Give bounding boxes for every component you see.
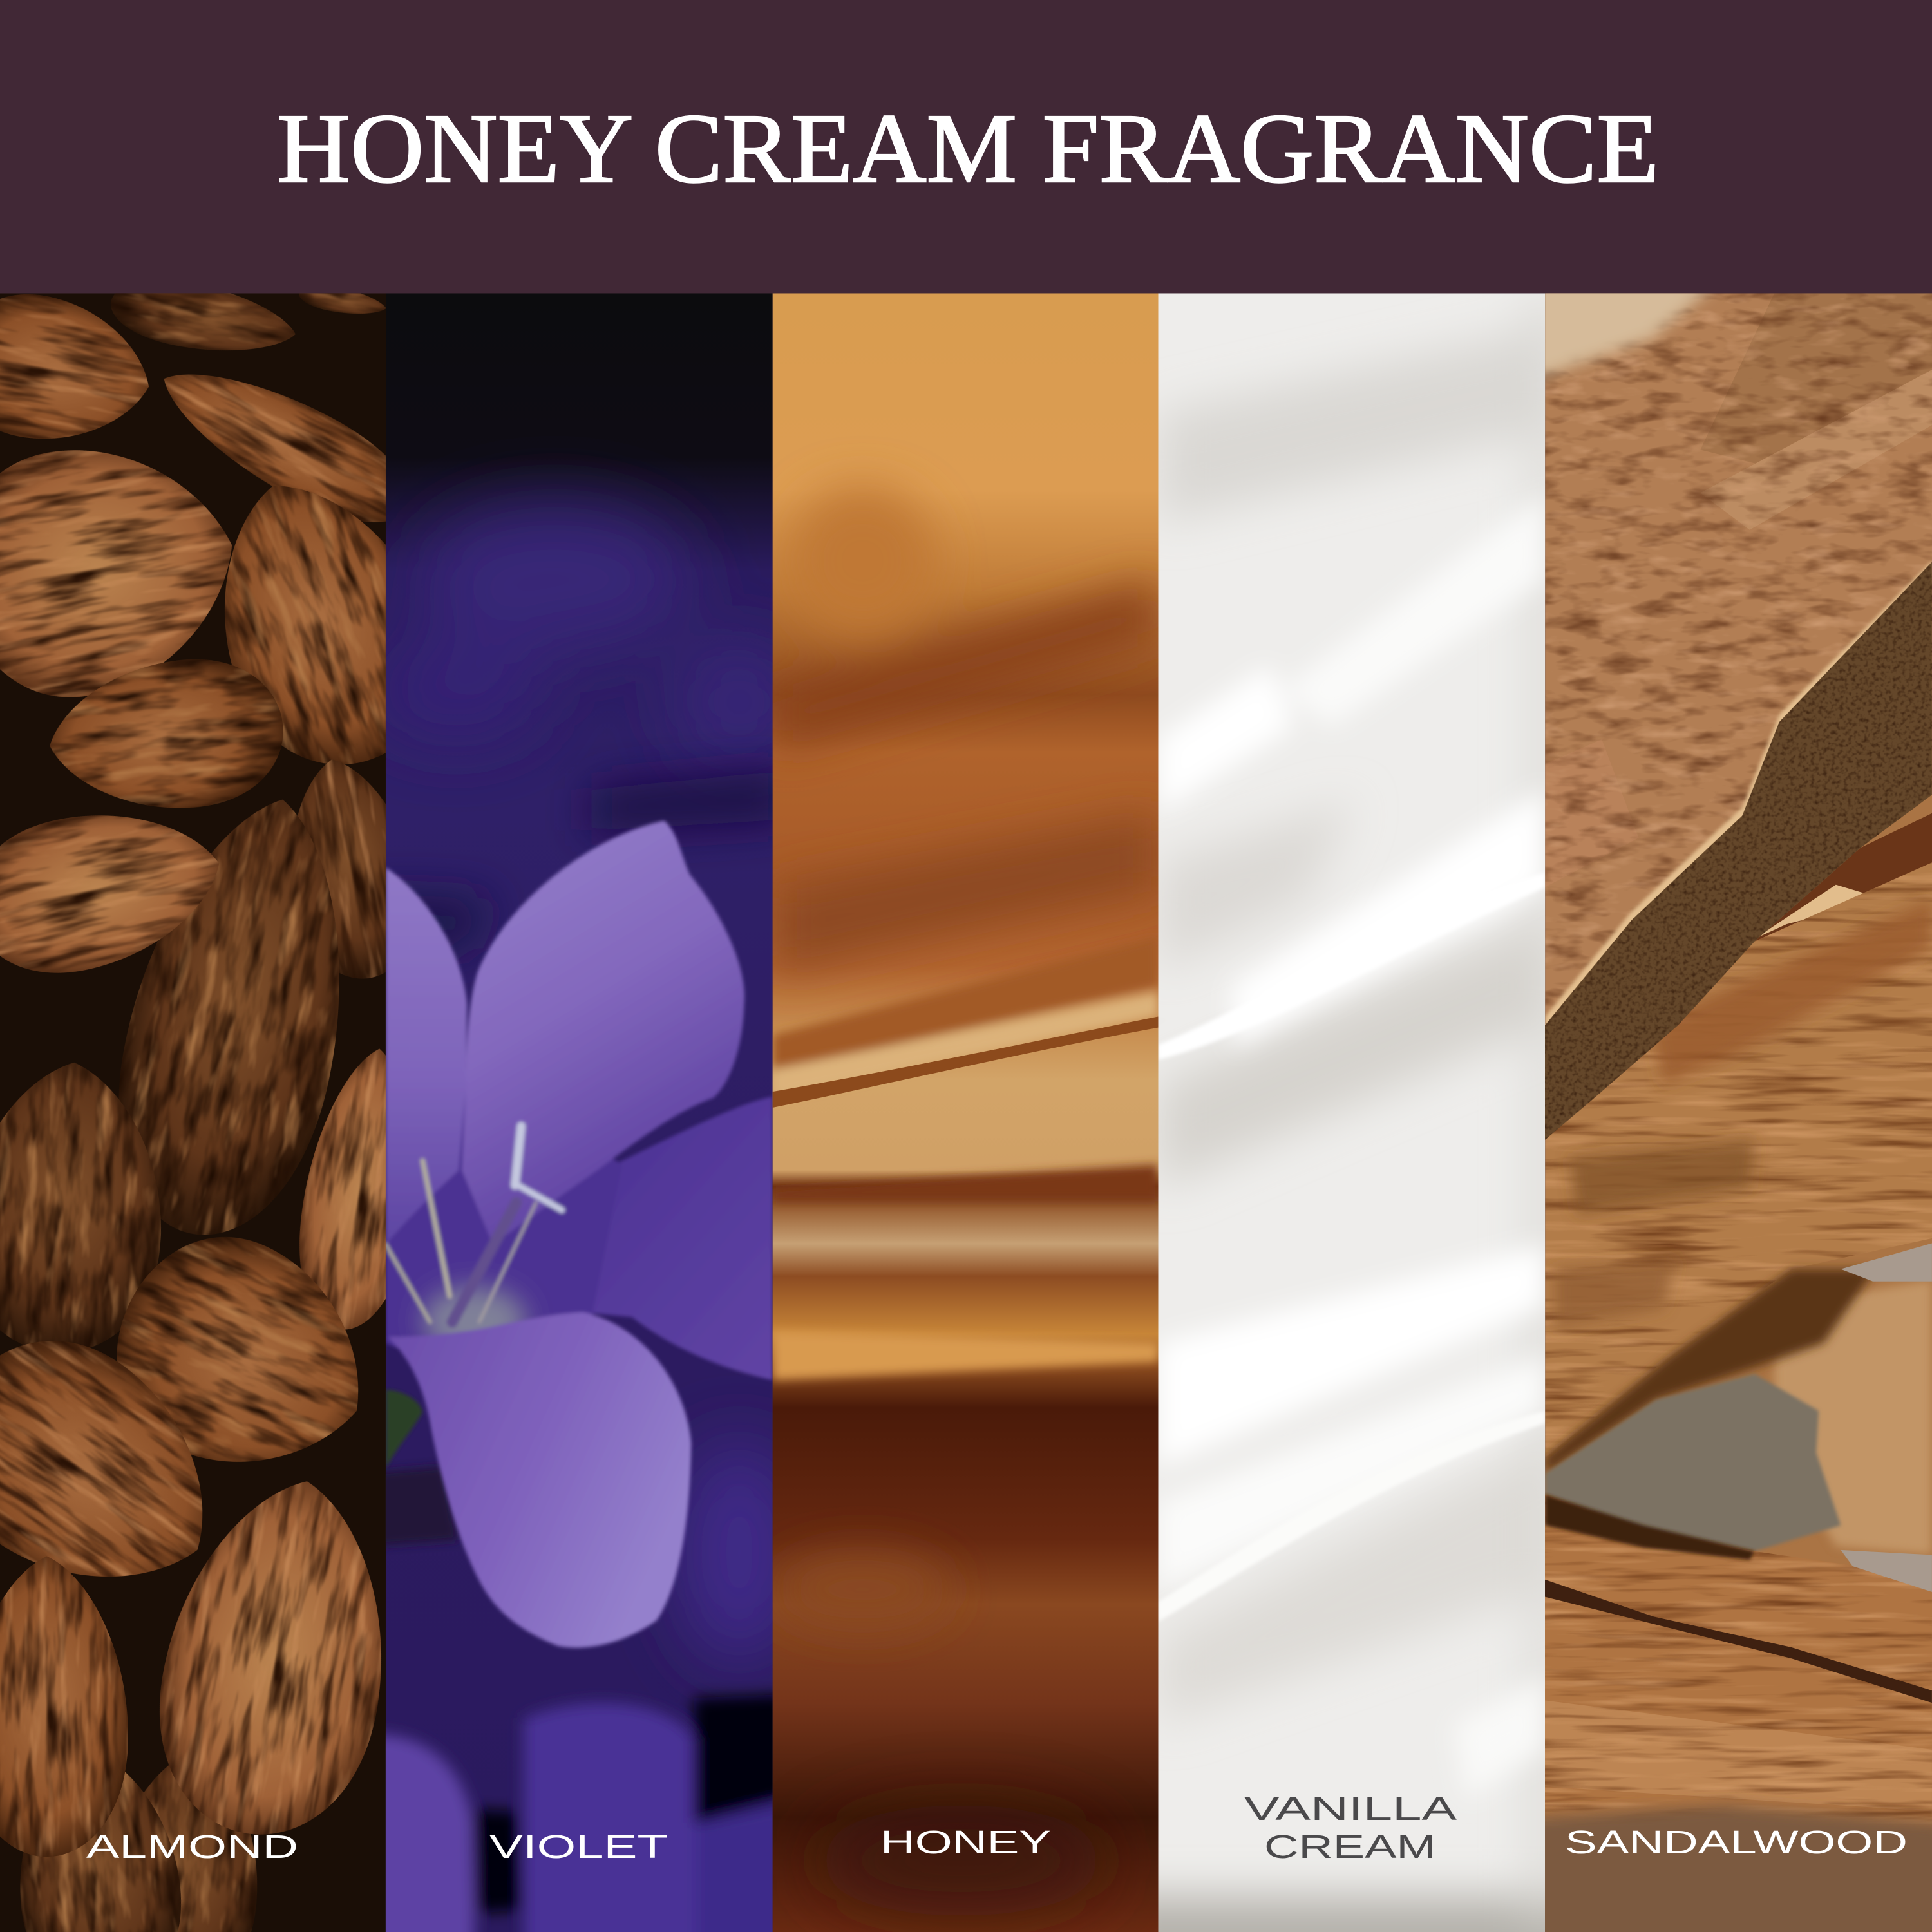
upper petal bbox=[462, 820, 744, 1244]
panel: almond photo bbox=[0, 293, 386, 1932]
panel: sandalwood photo bbox=[1528, 277, 1932, 1932]
title: HONEY CREAM FRAGRANCE bbox=[277, 94, 1659, 204]
panel: violet photo bbox=[385, 294, 773, 1932]
pale centre bbox=[422, 1286, 526, 1356]
panel: vanilla cream photo bbox=[1109, 293, 1602, 1932]
soft dark pool bbox=[813, 1805, 1109, 1916]
lower petal bbox=[388, 1312, 691, 1648]
grey weathered patch bbox=[1545, 1374, 1841, 1551]
label: violet: VIOLET bbox=[489, 1828, 668, 1865]
dark fold bands bbox=[370, 770, 788, 949]
green sepal bbox=[386, 1390, 422, 1469]
flower throat bbox=[386, 1072, 622, 1368]
dark cracks bbox=[1545, 1495, 1754, 1560]
flower bbox=[386, 820, 773, 1648]
dark slab bbox=[1545, 562, 1932, 1140]
label: honey: HONEY bbox=[880, 1824, 1051, 1861]
left petal bbox=[386, 867, 467, 1244]
dark bottom band bbox=[1528, 1805, 1932, 1932]
gap behind slab bbox=[1754, 813, 1932, 942]
lower slab dark patches bbox=[1555, 900, 1932, 1329]
label: vanilla cream: CREAM bbox=[1264, 1828, 1436, 1865]
cream highlights bbox=[1158, 493, 1545, 1799]
shadow under slab bbox=[1545, 1269, 1875, 1473]
blurred background folds bbox=[370, 505, 801, 1663]
header band bbox=[0, 0, 1932, 294]
right wood behind bbox=[1774, 1280, 1932, 1555]
lower blooms bbox=[370, 1694, 788, 1932]
label: vanilla cream: VANILLA bbox=[1244, 1790, 1457, 1827]
upper rough slab bbox=[1545, 293, 1932, 1025]
dark stripes left of lower petal bbox=[370, 1466, 459, 1546]
cream shadows bbox=[1109, 293, 1602, 1932]
wood highlight rim bbox=[1545, 561, 1932, 1035]
label: vanilla cream bbox=[1244, 1790, 1457, 1865]
label: sandalwood: SANDALWOOD bbox=[1565, 1824, 1908, 1861]
sharp ridges bbox=[1158, 873, 1545, 1059]
label: almond: ALMOND bbox=[86, 1828, 298, 1865]
panel: honey photo bbox=[773, 293, 1159, 1932]
right petal bbox=[518, 1097, 773, 1380]
sky gaps bbox=[1841, 1243, 1932, 1282]
stamens bbox=[386, 1126, 562, 1322]
lower slab bbox=[1545, 862, 1932, 1457]
planks bbox=[1545, 1495, 1932, 1932]
pale top corner bbox=[1528, 277, 1725, 382]
